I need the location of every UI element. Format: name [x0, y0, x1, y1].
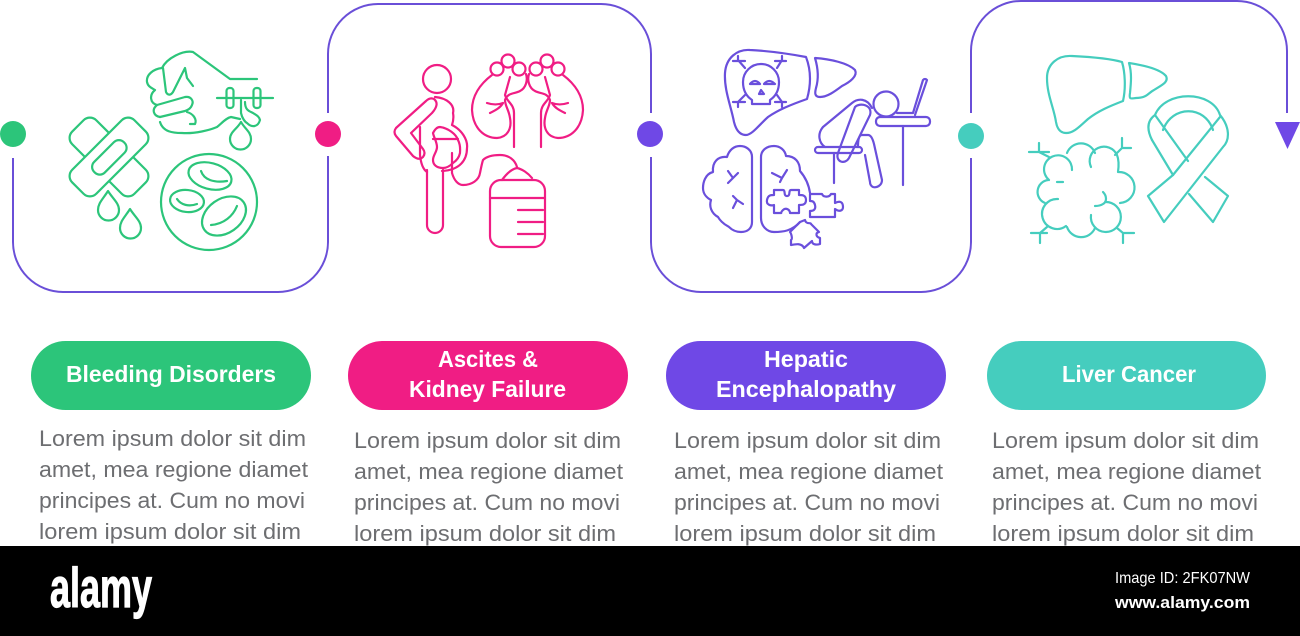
text block: Hepatic Encephalopathy: amet, mea regione diamet [674, 459, 944, 484]
icon: liver cancer [1029, 56, 1228, 243]
connector path [13, 1, 1287, 292]
text block: Liver Cancer: lorem ipsum dolor sit dim [992, 521, 1254, 546]
text block: Bleeding Disorders: Lorem ipsum dolor sit dim [39, 426, 306, 451]
step dot: pink [315, 121, 341, 147]
text block: Bleeding Disorders [39, 426, 309, 544]
text block: Liver Cancer [992, 428, 1262, 546]
text block: Ascites and Kidney Failure: lorem ipsum dolor sit dim [354, 521, 616, 546]
text block: Hepatic Encephalopathy: lorem ipsum dolor sit dim [674, 521, 936, 546]
text block: Ascites and Kidney Failure: Lorem ipsum dolor sit dim [354, 428, 621, 453]
icon: ascites and kidney failure [394, 54, 583, 247]
label pill: Bleeding Disorders: Bleeding Disorders [66, 361, 276, 387]
label pill: Liver Cancer [987, 341, 1266, 410]
text block: Hepatic Encephalopathy: principes at. Cum no movi [674, 490, 940, 515]
watermark footer bar: www.alamy.com [1114, 593, 1250, 612]
text block: Bleeding Disorders: principes at. Cum no movi [39, 488, 305, 513]
step dot: teal [958, 123, 984, 149]
label pill: Ascites & Kidney Failure [348, 341, 628, 410]
label pill: Ascites & Kidney Failure: Ascites & [438, 346, 538, 372]
step dot: purple [637, 121, 663, 147]
arrowhead [1275, 122, 1300, 149]
text block: Hepatic Encephalopathy: Lorem ipsum dolor sit dim [674, 428, 941, 453]
watermark footer bar: Image ID: 2FK07NW [1115, 570, 1251, 587]
icon: bleeding disorders [66, 52, 273, 250]
watermark footer bar [0, 546, 1300, 636]
text block: Liver Cancer: Lorem ipsum dolor sit dim [992, 428, 1259, 453]
label pill: Bleeding Disorders [31, 341, 311, 410]
text block: Ascites and Kidney Failure: principes at. Cum no movi [354, 490, 620, 515]
step dot: green [0, 121, 26, 147]
label pill: Hepatic Encephalopathy: Encephalopathy [716, 376, 896, 402]
label pill: Liver Cancer: Liver Cancer [1062, 361, 1196, 387]
text block: Ascites and Kidney Failure: amet, mea regione diamet [354, 459, 624, 484]
label pill: Ascites & Kidney Failure: Kidney Failure [409, 376, 566, 402]
label pill: Hepatic Encephalopathy: Hepatic [764, 346, 848, 372]
watermark footer bar: alamy [50, 556, 152, 619]
icon: hepatic encephalopathy [703, 50, 930, 248]
label pill: Hepatic Encephalopathy [666, 341, 946, 410]
text block: Hepatic Encephalopathy [674, 428, 944, 546]
text block: Liver Cancer: amet, mea regione diamet [992, 459, 1262, 484]
text block: Liver Cancer: principes at. Cum no movi [992, 490, 1258, 515]
text block: Bleeding Disorders: amet, mea regione diamet [39, 457, 309, 482]
text block: Ascites and Kidney Failure [354, 428, 624, 546]
text block: Bleeding Disorders: lorem ipsum dolor sit dim [39, 519, 301, 544]
